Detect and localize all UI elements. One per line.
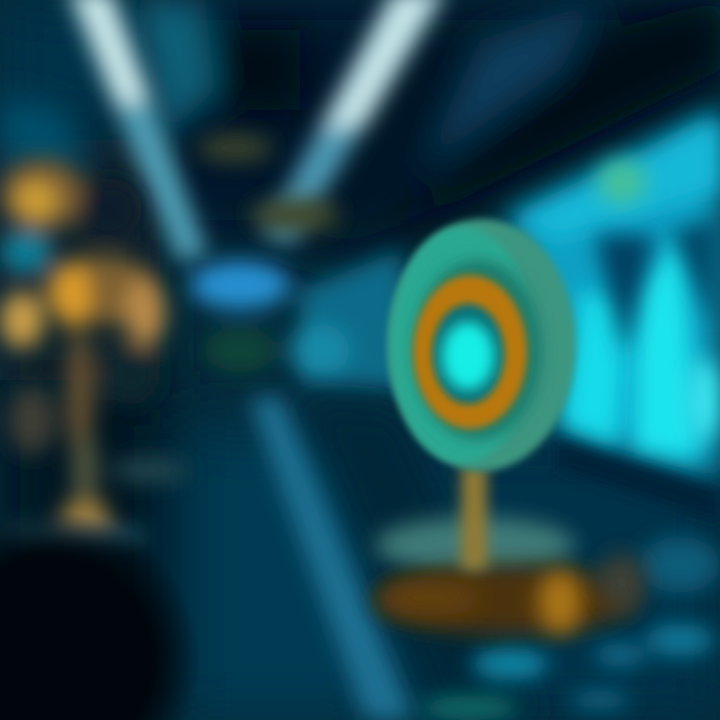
bullseye — [442, 322, 494, 390]
light beam: right — [262, 0, 448, 245]
cyan wall on right — [510, 110, 720, 480]
target — [388, 219, 576, 471]
pole — [461, 465, 487, 570]
inner ring — [432, 304, 504, 404]
background — [180, 269, 306, 408]
base highlights — [538, 570, 582, 634]
floor dark lane — [314, 383, 525, 700]
ceiling panels — [0, 0, 720, 240]
orange ring — [413, 275, 527, 429]
base top — [375, 517, 575, 573]
ceiling sign glows — [197, 134, 340, 232]
target stand — [375, 465, 646, 634]
floor strip — [250, 395, 415, 720]
base body — [375, 566, 635, 634]
left orange lights — [0, 159, 190, 544]
shaded inner face — [414, 260, 542, 440]
outer ring — [388, 219, 576, 471]
light beam: left — [66, 0, 208, 262]
lower right floor patches — [420, 537, 720, 720]
mid corridor glow — [190, 250, 420, 390]
bottom left shadow — [0, 510, 200, 720]
dark band below wall — [555, 440, 720, 522]
